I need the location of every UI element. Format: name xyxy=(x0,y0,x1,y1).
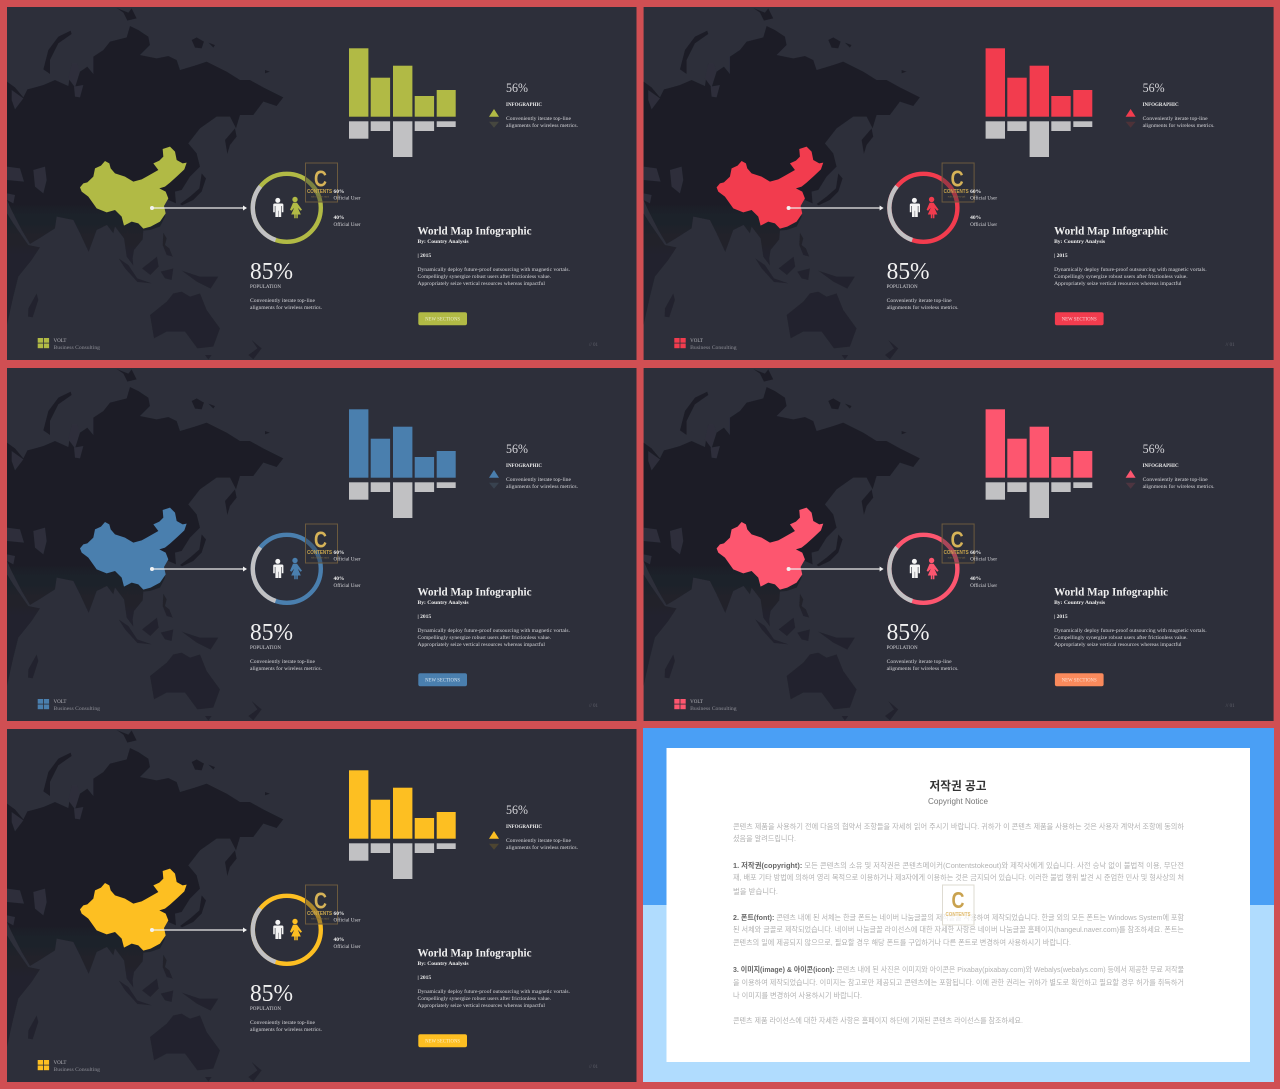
stat: 85% population: alignments for wireless metrics. xyxy=(250,304,323,311)
button xyxy=(418,312,467,325)
body text xyxy=(1054,627,1207,648)
section 2: font: 2. 폰트(font): 콘텐츠 내에 된 서체는 한글 폰트는 네이버 나눔글꼴의 저작물을 사용하여 제작되었습니다. 한글 외의 모든 폰트는 Windows System에 포함 xyxy=(733,912,1184,922)
panel: yellow slide xyxy=(7,729,636,1082)
stat: 56%: 56% xyxy=(1143,441,1165,456)
body text: Compellingly synergize robust users after frictionless value. xyxy=(1054,634,1188,641)
title block: World Map Infographic xyxy=(1054,224,1169,238)
donut ring xyxy=(253,535,321,603)
button xyxy=(1055,673,1104,686)
button: NEW SECTIONS xyxy=(1062,679,1097,684)
stat: 85% population xyxy=(887,259,959,311)
donut ring xyxy=(889,174,957,242)
watermark logo: C xyxy=(951,527,964,553)
title block: By: Country Analysis xyxy=(418,239,468,245)
stat: 85% population: POPULATION xyxy=(250,646,281,651)
stat: 56%: Conveniently iterate top-line xyxy=(506,116,572,122)
user share labels: Official User xyxy=(970,221,997,228)
user share labels xyxy=(334,911,361,950)
bar chart xyxy=(986,48,1092,157)
user share labels: Official User xyxy=(334,916,361,924)
stat: 56%: Conveniently iterate top-line xyxy=(506,477,572,483)
notice heading xyxy=(928,778,988,806)
user share labels: 40% xyxy=(334,576,344,582)
stat: 85% population: 85% xyxy=(887,259,930,285)
body text: Dynamically deploy future-proof outsourcing with magnetic vortals. xyxy=(1054,627,1207,634)
china highlight xyxy=(717,147,823,229)
user share labels xyxy=(334,189,361,228)
icon: man and woman xyxy=(910,197,939,218)
stat: 56%: alignments for wireless metrics. xyxy=(506,844,579,851)
watermark logo: CONTENTS xyxy=(944,189,969,195)
donut ring xyxy=(253,174,321,242)
footer brand: Business Consulting xyxy=(54,1067,100,1073)
watermark logo: C xyxy=(951,166,964,192)
title block xyxy=(418,584,532,620)
section 1: copyright: 재, 배포 기타 방법에 의하여 영리 목적으로 이용하거나 제3자에게 이용하는 것은 금지되어 있습니다. 이러한 불법 행위 발견 시 준엄한 민사 및 형사상의 처 xyxy=(733,872,1184,882)
stat: 56%: Conveniently iterate top-line xyxy=(1143,477,1208,483)
panel: pink slide xyxy=(644,368,1274,721)
section 1: copyright xyxy=(733,860,1184,896)
stat: 85% population: 85% xyxy=(250,981,293,1007)
intro paragraph: 콘텐츠 제품을 사용하기 전에 다음의 협약서 조항들을 자세히 읽어 주시기 바랍니다. 귀하가 이 콘텐츠 제품을 사용하는 것은 사용자 계약서 조항에 동의하 xyxy=(733,821,1184,831)
body text: Dynamically deploy future-proof outsourcing with magnetic vortals. xyxy=(418,266,571,273)
icon: trend triangles xyxy=(489,109,499,128)
stat: 85% population: Conveniently iterate top-line xyxy=(250,1020,316,1026)
user share labels: Official User xyxy=(334,582,361,589)
watermark logo: C xyxy=(314,888,327,914)
user share labels xyxy=(970,550,997,589)
footer brand: Business Consulting xyxy=(54,345,100,351)
footer brand xyxy=(38,699,100,712)
arrow: china to ring xyxy=(787,206,884,210)
user share labels: 40% xyxy=(970,215,981,221)
arrow: china to ring xyxy=(787,566,884,572)
stat: 56% xyxy=(506,802,579,851)
stat: 56%: 56% xyxy=(506,80,528,95)
title block: | 2015 xyxy=(418,253,431,259)
body text: Dynamically deploy future-proof outsourcing with magnetic vortals. xyxy=(1054,266,1207,273)
user share labels: Official User xyxy=(334,556,361,562)
body text: Appropriately seize vertical resources whereas impactful xyxy=(1054,280,1182,287)
world map xyxy=(644,8,920,360)
stat: 56%: alignments for wireless metrics. xyxy=(1143,122,1215,129)
stat: 56%: 56% xyxy=(1143,80,1165,95)
china highlight xyxy=(80,147,187,229)
watermark logo: stokeout xyxy=(948,194,966,198)
watermark logo: CONTENTS xyxy=(307,189,332,195)
watermark logo: stokeout xyxy=(311,194,329,198)
title block: | 2015 xyxy=(1054,614,1068,620)
watermark logo: CONTENTS xyxy=(946,912,971,918)
button: NEW SECTIONS xyxy=(425,1040,460,1045)
title block: By: Country Analysis xyxy=(418,600,468,606)
watermark logo xyxy=(942,163,974,202)
stat: 85% population: POPULATION xyxy=(250,285,281,290)
intro paragraph: 셨음을 알려드립니다. xyxy=(733,833,796,843)
bar chart xyxy=(986,409,1092,518)
watermark logo: stokeout xyxy=(311,556,329,560)
user share labels: 60% xyxy=(970,550,981,556)
title block: World Map Infographic xyxy=(418,224,532,238)
user share labels: 40% xyxy=(970,576,981,582)
user share labels: Official User xyxy=(970,194,997,202)
page number: // 01 xyxy=(589,704,599,709)
watermark logo xyxy=(306,163,338,202)
stat: 56%: alignments for wireless metrics. xyxy=(506,122,579,129)
stat: 85% population xyxy=(250,259,323,311)
stat: 85% population: alignments for wireless metrics. xyxy=(250,1026,323,1033)
watermark logo: C xyxy=(314,166,327,192)
user share labels: 40% xyxy=(334,937,344,943)
section 3: image and icon: 나 이미지를 변경하여 사용하시기 바랍니다. xyxy=(733,990,862,1000)
section 1: copyright: 벌을 받습니다. xyxy=(733,886,778,896)
section 2: font xyxy=(733,912,1184,947)
stat: 56%: INFOGRAPHIC xyxy=(506,824,542,830)
footer brand: Business Consulting xyxy=(690,706,737,712)
user share labels xyxy=(970,189,997,228)
watermark logo xyxy=(942,885,974,925)
stat: 56%: INFOGRAPHIC xyxy=(506,463,542,469)
watermark logo: stokeout xyxy=(948,556,966,560)
stat: 56% xyxy=(1143,80,1215,129)
stat: 85% population: Conveniently iterate top-line xyxy=(887,298,952,304)
footer brand: VOLT xyxy=(690,339,703,344)
title block xyxy=(1054,224,1169,259)
title block xyxy=(418,224,532,259)
arrow: china to ring xyxy=(150,928,247,932)
stat: 85% population: 85% xyxy=(887,620,930,646)
arrow: china to ring xyxy=(150,206,247,210)
world map xyxy=(644,369,920,721)
body text: Compellingly synergize robust users after frictionless value. xyxy=(418,273,552,280)
stat: 56%: 56% xyxy=(506,802,528,817)
watermark logo: CONTENTS xyxy=(944,550,969,556)
body text: Dynamically deploy future-proof outsourcing with magnetic vortals. xyxy=(418,627,571,634)
title block: | 2015 xyxy=(1054,253,1068,259)
panel: olive slide xyxy=(7,7,636,360)
stat: 56%: INFOGRAPHIC xyxy=(506,102,542,108)
stat: 85% population: alignments for wireless metrics. xyxy=(250,665,323,672)
china highlight xyxy=(80,869,187,951)
icon: trend triangles xyxy=(489,470,499,489)
user share labels: Official User xyxy=(334,943,361,950)
footer brand: VOLT xyxy=(54,339,66,344)
stat: 85% population: POPULATION xyxy=(887,285,918,290)
button xyxy=(418,1034,467,1047)
title block: | 2015 xyxy=(418,975,431,981)
watermark logo: C xyxy=(314,527,327,553)
body text: Compellingly synergize robust users after frictionless value. xyxy=(418,995,552,1002)
stat: 85% population: 85% xyxy=(250,259,293,285)
footer brand: Business Consulting xyxy=(54,706,100,712)
china highlight xyxy=(80,508,187,590)
stat: 56%: INFOGRAPHIC xyxy=(1143,463,1179,469)
button: NEW SECTIONS xyxy=(425,318,460,323)
watermark logo: C xyxy=(952,887,964,913)
stat: 85% population xyxy=(250,981,323,1033)
footer brand xyxy=(38,1060,100,1073)
stat: 85% population: Conveniently iterate top-line xyxy=(887,659,952,665)
panel: blue slide xyxy=(7,368,636,721)
arrow: china to ring xyxy=(150,566,247,572)
watermark logo xyxy=(306,524,338,563)
page number: // 01 xyxy=(589,343,599,348)
icon: trend triangles xyxy=(1126,109,1136,128)
user share labels: Official User xyxy=(334,194,361,202)
stat: 85% population: Conveniently iterate top-line xyxy=(250,298,316,304)
stat: 56%: Conveniently iterate top-line xyxy=(506,838,572,844)
user share labels: Official User xyxy=(334,221,361,228)
icon: man and woman xyxy=(910,558,939,579)
body text: Compellingly synergize robust users after frictionless value. xyxy=(418,634,552,641)
title block: By: Country Analysis xyxy=(1054,600,1105,606)
icon: man and woman xyxy=(273,197,302,218)
stat: 56%: Conveniently iterate top-line xyxy=(1143,116,1208,122)
section 2: font: 콘텐츠의 일에 제공되지 않으므로, 필요할 경우 해당 폰트를 구입하거나 다른 폰트로 변경하여 사용하시기 바랍니다. xyxy=(733,937,1071,947)
notice card xyxy=(666,748,1250,1062)
world map xyxy=(7,369,283,721)
stat: 85% population: POPULATION xyxy=(887,646,918,651)
icon: man and woman xyxy=(273,919,302,940)
bar chart xyxy=(349,48,456,157)
body text xyxy=(418,988,571,1009)
body text: Dynamically deploy future-proof outsourcing with magnetic vortals. xyxy=(418,988,571,995)
body text xyxy=(418,627,571,648)
stat: 85% population: Conveniently iterate top-line xyxy=(250,659,316,665)
page number: // 01 xyxy=(1226,704,1235,709)
footer brand: VOLT xyxy=(54,1061,66,1066)
body text: Compellingly synergize robust users after frictionless value. xyxy=(1054,273,1188,280)
user share labels: Official User xyxy=(970,556,997,562)
stat: 85% population: POPULATION xyxy=(250,1007,281,1012)
stat: 85% population: alignments for wireless metrics. xyxy=(887,665,959,672)
body text: Appropriately seize vertical resources whereas impactful xyxy=(1054,641,1182,648)
user share labels: 60% xyxy=(334,911,344,917)
title block: By: Country Analysis xyxy=(418,961,468,967)
stat: 85% population xyxy=(887,620,959,672)
stat: 56% xyxy=(506,441,579,490)
stat: 56% xyxy=(506,80,579,129)
user share labels: 40% xyxy=(334,215,344,221)
world map xyxy=(7,8,283,360)
bar chart xyxy=(349,409,456,518)
user share labels: Official User xyxy=(970,582,997,589)
watermark logo: CONTENTS xyxy=(307,550,332,556)
panel: copyright notice xyxy=(643,728,1274,1082)
donut ring xyxy=(253,896,321,964)
notice heading: 저작권 공고 xyxy=(930,778,986,793)
body text: Appropriately seize vertical resources whereas impactful xyxy=(418,280,545,287)
title block: World Map Infographic xyxy=(1054,584,1169,598)
stat: 56%: 56% xyxy=(506,441,528,456)
icon: man and woman xyxy=(273,558,302,579)
footer brand: VOLT xyxy=(54,700,66,705)
stat: 56%: alignments for wireless metrics. xyxy=(1143,483,1215,490)
world map xyxy=(7,730,283,1082)
watermark logo xyxy=(306,885,338,924)
button: NEW SECTIONS xyxy=(425,679,460,684)
footer brand xyxy=(674,699,737,712)
watermark logo xyxy=(942,524,974,563)
section 3: image and icon: 3. 이미지(image) & 아이콘(icon): 콘텐츠 내에 된 사진은 이미지와 아이콘은 Pixabay(pixabay.com)와 Webalys(webalys.com) 등에서 제공한 무료 저작물 xyxy=(733,964,1184,974)
button xyxy=(418,673,467,686)
footer brand: Business Consulting xyxy=(690,345,737,351)
icon: trend triangles xyxy=(489,831,499,850)
page number: // 01 xyxy=(1226,343,1235,348)
user share labels: 60% xyxy=(334,189,344,195)
stat: 85% population: 85% xyxy=(250,620,293,646)
section 2: font: 된 서체와 글꼴로 제작되었습니다. 네이버 나눔글꼴 라이선스에 대한 자세한 사항은 네이버 나눔글꼴 홈페이지(hangeul.naver.com)를 참조하세요. 폰트는 xyxy=(733,924,1184,934)
notice heading: Copyright Notice xyxy=(928,796,988,806)
watermark logo: stokeout xyxy=(311,916,329,920)
section 3: image and icon xyxy=(733,964,1184,1000)
section 1: copyright: 1. 저작권(copyright): 모든 콘텐츠의 소유 및 저작권은 콘텐츠메이커(Contentstokeout)와 제작사에게 있습니다. 사전 승낙 없이 불법적 이용, 무단전 xyxy=(733,860,1184,870)
section 3: image and icon: 을 이용하여 제작되었습니다. 이미지는 참고로만 제공되고 콘텐츠에는 포함됩니다. 이에 관한 권리는 귀하가 별도로 확인하고 필요할 경우 허가를 취득하거 xyxy=(733,977,1184,987)
user share labels xyxy=(334,550,361,589)
stat: 56%: alignments for wireless metrics. xyxy=(506,483,579,490)
footer brand xyxy=(674,338,737,351)
stat: 85% population xyxy=(250,620,323,672)
button xyxy=(1055,312,1104,325)
button: NEW SECTIONS xyxy=(1062,318,1097,323)
body text: Appropriately seize vertical resources whereas impactful xyxy=(418,1002,545,1009)
china highlight xyxy=(717,508,823,590)
intro paragraph xyxy=(733,821,1184,843)
body text: Appropriately seize vertical resources whereas impactful xyxy=(418,641,545,648)
icon: trend triangles xyxy=(1126,470,1136,489)
title block: World Map Infographic xyxy=(418,946,532,960)
donut ring xyxy=(889,535,957,603)
title block: World Map Infographic xyxy=(418,584,532,598)
user share labels: 60% xyxy=(334,550,344,556)
body text xyxy=(1054,266,1207,287)
stat: 85% population: alignments for wireless metrics. xyxy=(887,304,959,311)
closing note: 콘텐츠 제품 라이선스에 대한 자세한 사항은 홈페이지 하단에 기재된 콘텐츠 라이선스를 참조하세요. xyxy=(733,1015,1023,1025)
title block xyxy=(418,946,532,981)
bar chart xyxy=(349,770,456,879)
page number: // 01 xyxy=(589,1065,599,1070)
panel: red slide xyxy=(644,7,1274,360)
footer brand xyxy=(38,338,100,351)
stat: 56% xyxy=(1143,441,1215,490)
body text xyxy=(418,266,571,287)
stat: 56%: INFOGRAPHIC xyxy=(1143,102,1179,108)
title block xyxy=(1054,584,1169,620)
footer brand: VOLT xyxy=(690,700,703,705)
watermark logo: CONTENTS xyxy=(307,911,332,917)
user share labels: 60% xyxy=(970,189,981,195)
title block: | 2015 xyxy=(418,614,431,620)
title block: By: Country Analysis xyxy=(1054,239,1105,245)
